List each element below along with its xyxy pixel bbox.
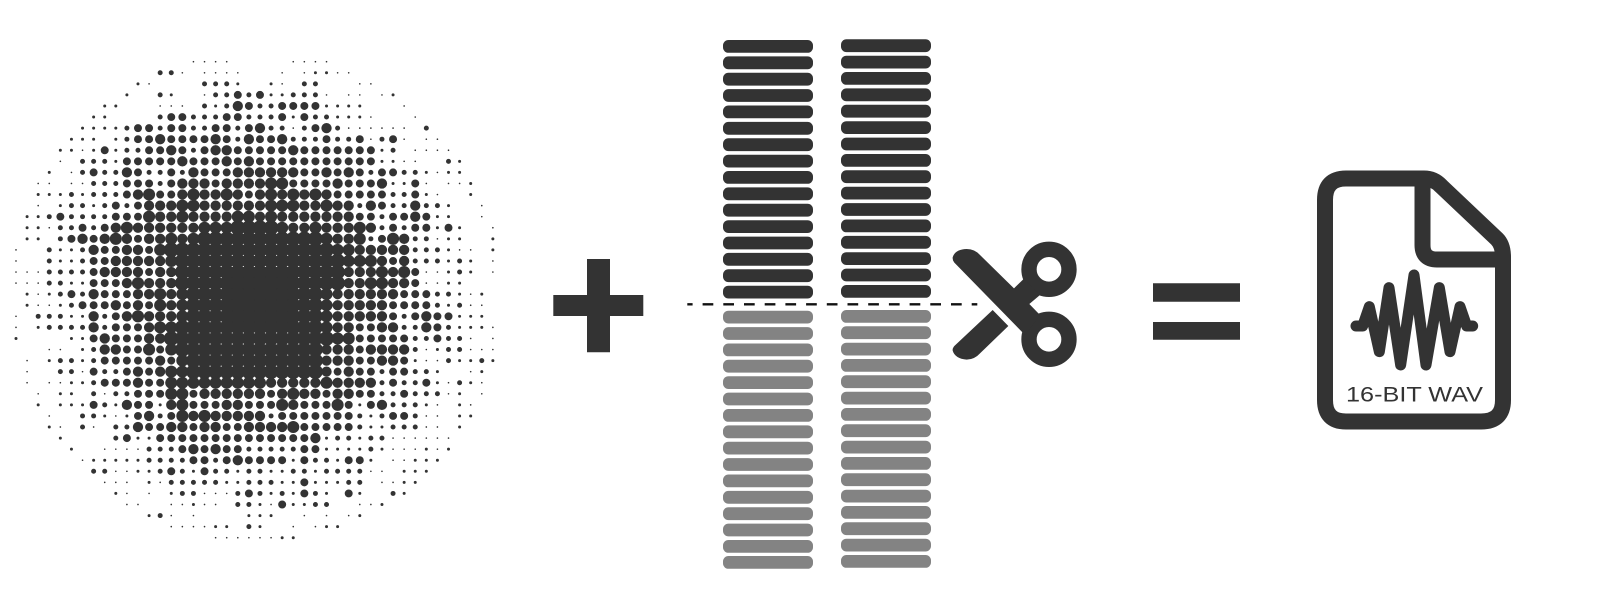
bar columns: grey lower half	[723, 310, 931, 569]
icon: 16-bit wav file: 16-BIT WAV	[1346, 384, 1483, 407]
halftone sound field circle	[16, 62, 494, 538]
dashed cut line	[687, 303, 977, 305]
icon: scissors	[953, 249, 1069, 360]
plus sign	[553, 259, 643, 352]
bar columns: dark upper half	[723, 39, 931, 299]
equals sign	[1153, 283, 1240, 340]
icon: 16-bit wav file	[1325, 178, 1503, 422]
